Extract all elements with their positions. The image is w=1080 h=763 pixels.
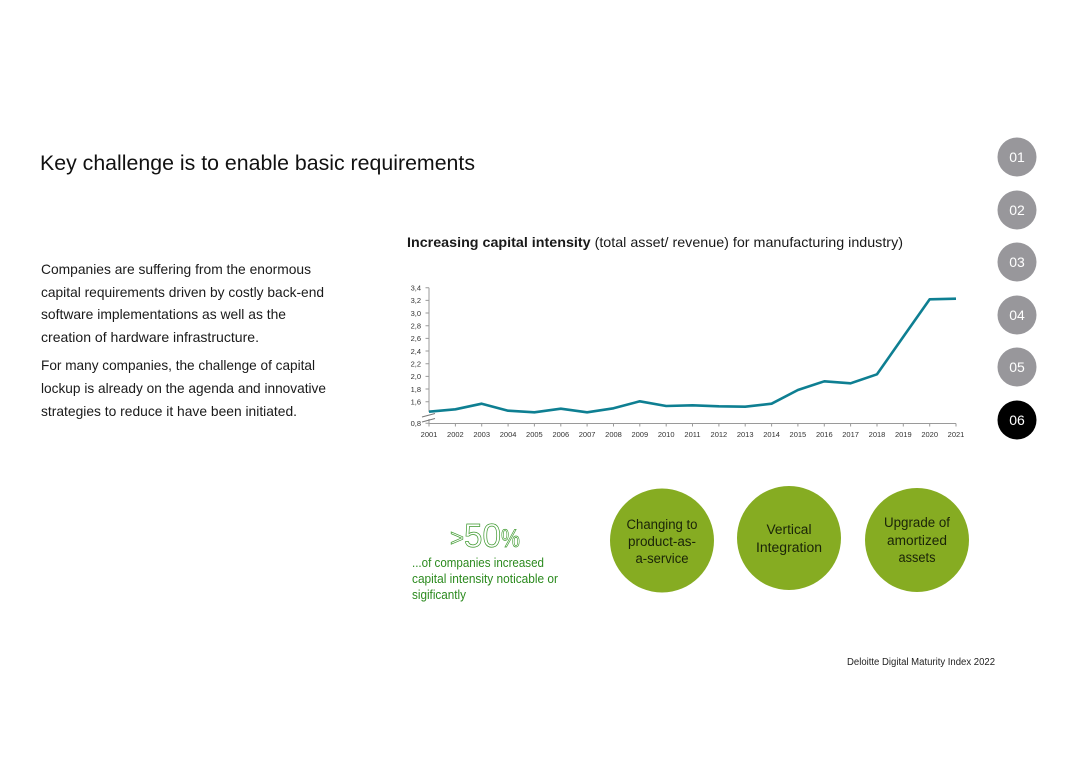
text block: capital requirements: strategies to reduce it have been initiated. [41, 403, 297, 419]
strategy circle: amortized assets: amortized [887, 533, 947, 548]
callout: more than 50 percent [412, 517, 558, 602]
y axis labels: 0,8 [411, 419, 421, 428]
nav 04: 04 [1009, 307, 1025, 323]
nav 06 active: 06 [1009, 412, 1025, 428]
x axis labels: 2011 [684, 430, 701, 439]
strategy circle: amortized assets [865, 488, 969, 592]
x axis labels: 2008 [605, 430, 622, 439]
strategy circle: product-as-a-service [610, 488, 714, 592]
big outlined number: > [450, 525, 464, 552]
strategy circle: product-as-a-service: Changing to [626, 517, 698, 532]
x axis labels: 2004 [500, 430, 516, 439]
x axis labels: 2006 [552, 430, 569, 439]
y axis labels: 3,2 [411, 296, 421, 305]
nav 01 [998, 138, 1036, 176]
x axis labels: 2016 [816, 430, 833, 439]
x axis labels: 2009 [631, 430, 648, 439]
data line [429, 299, 956, 412]
nav 04 [998, 296, 1036, 334]
nav 03 [998, 242, 1036, 282]
x axis labels: 2012 [711, 430, 727, 439]
strategy circle: vertical integration: Vertical [766, 522, 812, 537]
y axis labels [411, 284, 421, 428]
big outlined number [450, 517, 520, 554]
source note: Deloitte Digital Maturity Index 2022 [847, 657, 995, 668]
strategy circle: vertical integration: Integration [756, 540, 822, 555]
x axis labels: 2017 [842, 430, 859, 439]
x axis labels: 2019 [895, 430, 912, 439]
x axis labels: 2013 [737, 430, 754, 439]
x axis labels: 2007 [579, 430, 595, 439]
text block: capital requirements: For many companies, the challenge of capital [41, 357, 315, 373]
y axis [426, 288, 429, 424]
x axis labels: 2014 [763, 430, 780, 439]
strategy circle: amortized assets: Upgrade of [884, 515, 950, 530]
x axis labels: 2020 [921, 430, 938, 439]
text block: capital requirements: Companies are suffering from the enormous [41, 261, 311, 277]
x axis labels [421, 430, 964, 439]
callout text: sigificantly [412, 588, 467, 602]
y axis labels: 2,0 [411, 372, 421, 381]
strategy circle: vertical integration [737, 486, 841, 590]
text block: capital requirements [41, 261, 326, 419]
text block: capital requirements: lockup is already on the agenda and innovative [41, 380, 326, 396]
x axis labels: 2021 [948, 430, 964, 439]
x axis labels: 2005 [526, 430, 543, 439]
navigation dots [998, 138, 1036, 440]
y axis labels: 1,6 [411, 398, 421, 406]
strategy circle: amortized assets: assets [898, 550, 936, 565]
y axis labels: 2,2 [411, 360, 421, 368]
x axis labels: 2018 [869, 430, 885, 439]
x axis labels: 2003 [473, 430, 490, 439]
y axis labels: 2,6 [411, 334, 421, 343]
text block: capital requirements: software implementations as well as the [41, 306, 286, 322]
nav 06 active [998, 400, 1036, 440]
y axis labels: 2,8 [411, 322, 421, 330]
nav 02 [998, 190, 1036, 230]
y axis labels: 2,4 [411, 347, 421, 356]
y axis labels: 1,8 [411, 385, 421, 394]
big outlined number: % [501, 525, 520, 553]
x axis labels: 2015 [790, 430, 806, 439]
callout text: capital intensity noticable or [412, 572, 558, 586]
y axis labels: 3,0 [411, 309, 421, 318]
x axis [429, 424, 956, 426]
nav 01: 01 [1009, 149, 1025, 165]
nav 03: 03 [1009, 254, 1025, 270]
x axis labels: 2002 [447, 430, 464, 439]
nav 02: 02 [1009, 202, 1025, 218]
strategy circle: product-as-a-service: product-as- [628, 534, 696, 549]
nav 05: 05 [1009, 359, 1025, 375]
line chart: capital intensity [411, 284, 964, 439]
axis break [422, 414, 435, 422]
x axis labels: 2001 [421, 430, 437, 439]
text block: capital requirements: creation of hardware infrastructure. [41, 329, 259, 345]
chart heading: Increasing capital intensity (total asset/ revenue) for manufacturing industry) [407, 234, 903, 250]
x axis labels: 2010 [658, 430, 675, 439]
text block: capital requirements: capital requirements driven by costly back-end [41, 284, 324, 300]
strategy circle: product-as-a-service: a-service [636, 551, 688, 566]
y axis labels: 3,4 [411, 284, 421, 292]
callout text [412, 556, 558, 602]
callout text: ...of companies increased [412, 556, 544, 570]
title: Key challenge is to enable basic requirements [40, 152, 475, 175]
big outlined number: 50 [464, 517, 501, 554]
nav 05 [998, 348, 1036, 386]
